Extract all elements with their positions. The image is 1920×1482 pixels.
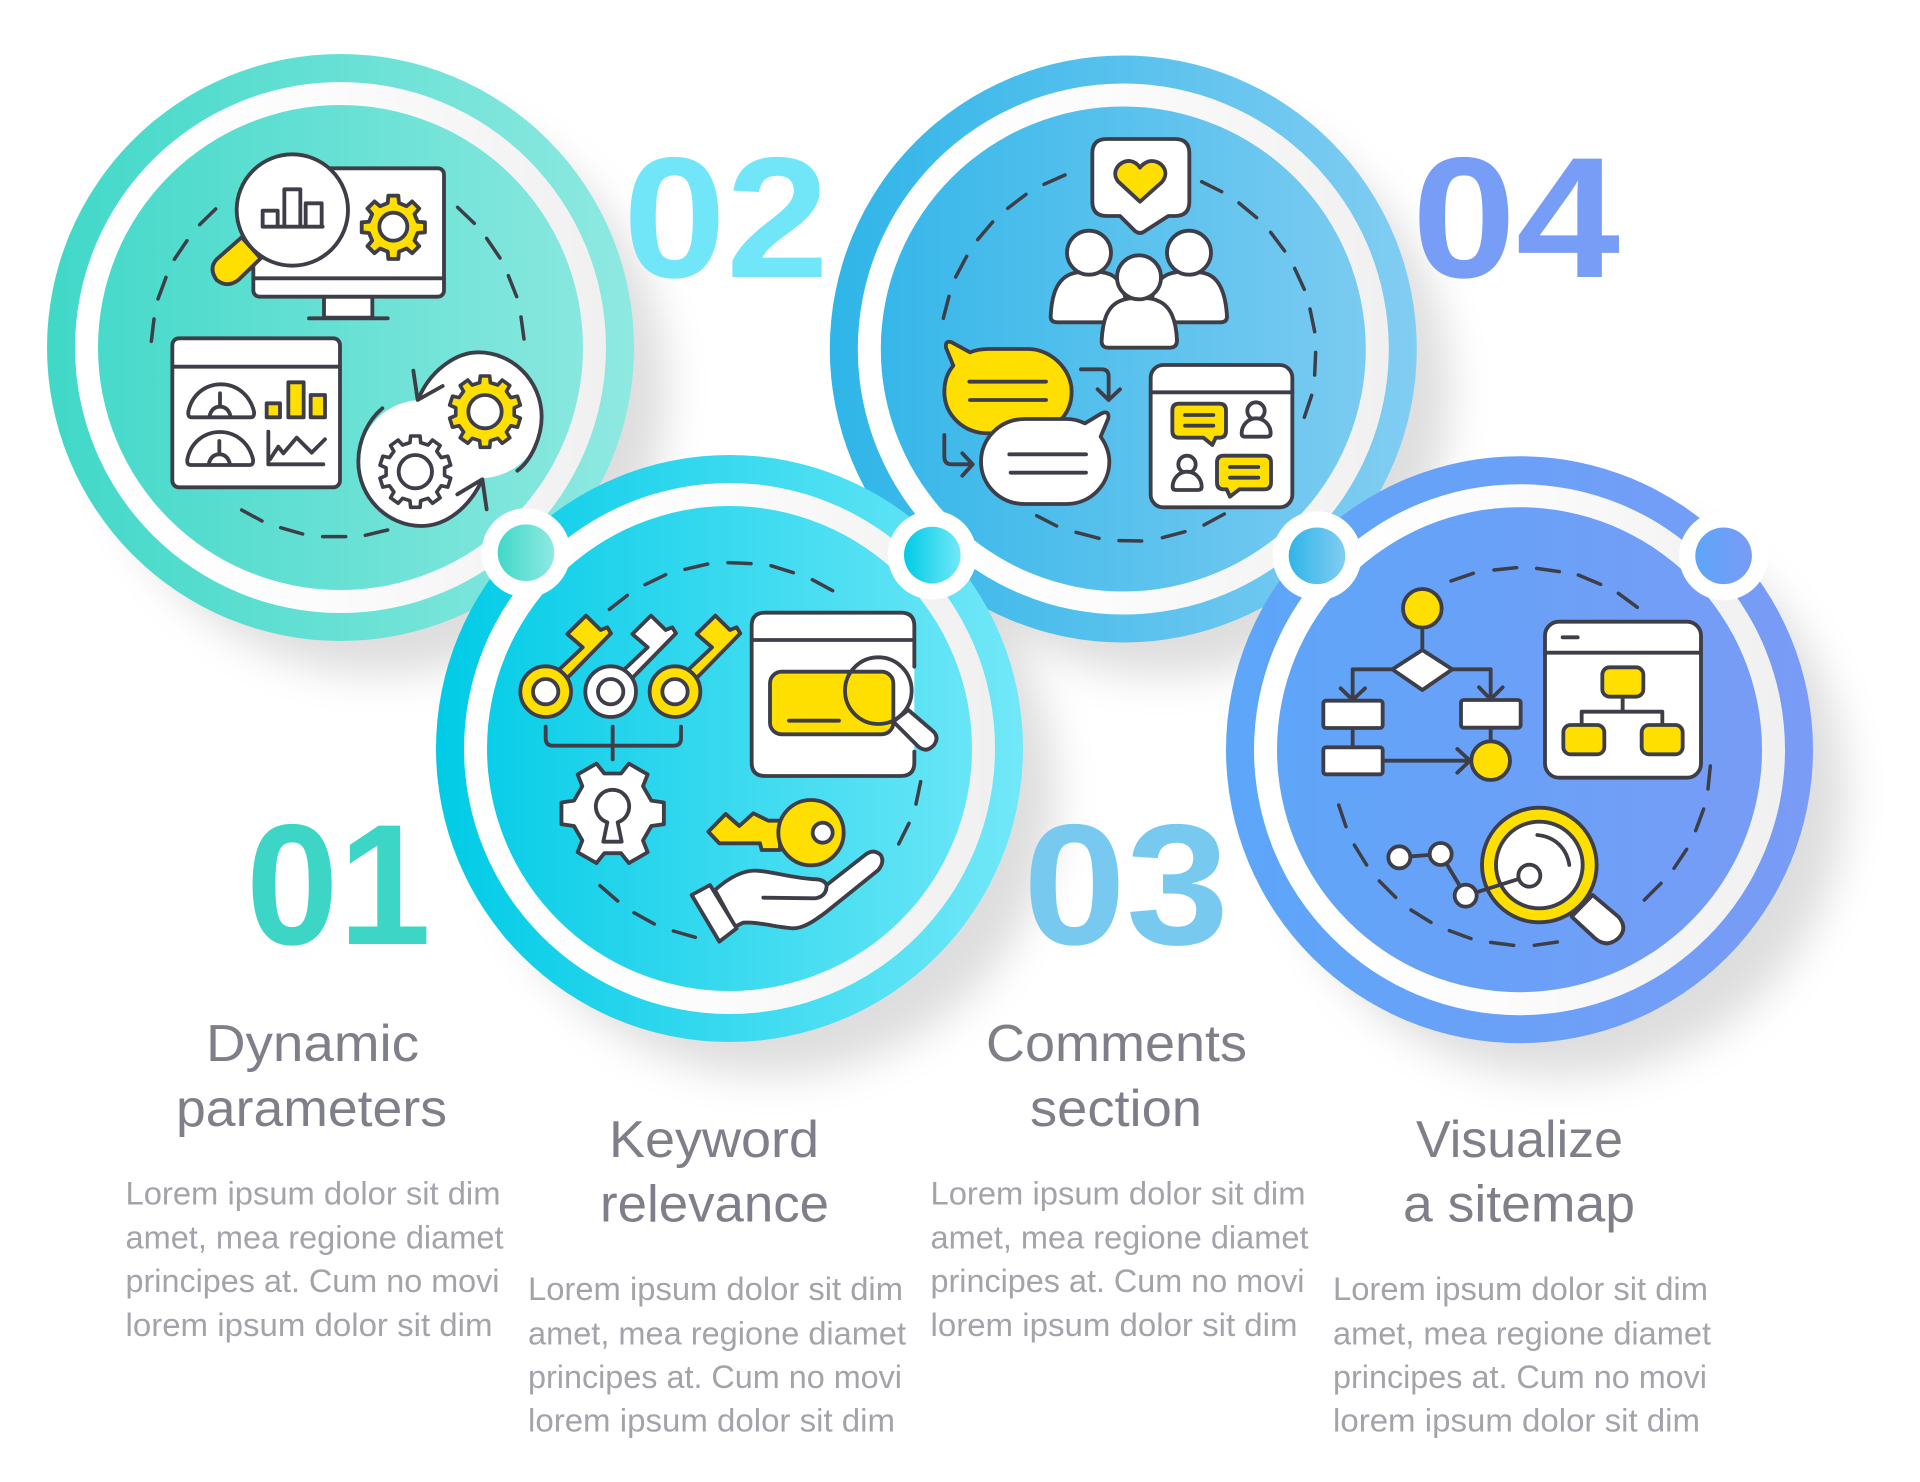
heading: Comments <box>986 1015 1247 1073</box>
heading: Dynamic <box>206 1015 419 1073</box>
body text: principes at. Cum no movi <box>528 1359 902 1395</box>
text block: visualize a sitemap <box>1333 1111 1711 1438</box>
number 03: 03 <box>1023 789 1229 981</box>
body text: principes at. Cum no movi <box>1333 1359 1707 1395</box>
body text: lorem ipsum dolor sit dim <box>930 1307 1298 1343</box>
body text: lorem ipsum dolor sit dim <box>126 1307 492 1343</box>
icons: community, chat, comment window <box>943 139 1316 541</box>
connector dot 2 <box>888 510 977 600</box>
body text: Lorem ipsum dolor sit dim <box>930 1176 1306 1212</box>
body text <box>126 1176 504 1343</box>
connector dot 4 <box>1679 511 1768 600</box>
heading <box>176 1015 447 1138</box>
body text <box>930 1176 1309 1343</box>
body text: Lorem ipsum dolor sit dim <box>1333 1271 1708 1307</box>
icons: keys, keyhole gear, search window, key in hand <box>520 563 937 942</box>
text block: comments section <box>930 1015 1309 1343</box>
number 01: 01 <box>246 789 431 981</box>
body text: lorem ipsum dolor sit dim <box>528 1402 895 1438</box>
panel: circle 1 dynamic parameters <box>47 54 634 641</box>
heading <box>986 1015 1247 1138</box>
heading: relevance <box>600 1176 829 1234</box>
body text: amet, mea regione diamet <box>930 1220 1309 1256</box>
connector dot 3 <box>1272 511 1362 600</box>
soft drop shadows <box>97 105 1846 1077</box>
heading: a sitemap <box>1403 1176 1635 1234</box>
body text: lorem ipsum dolor sit dim <box>1333 1402 1700 1438</box>
icons: analytics, dashboard, gears <box>151 154 543 537</box>
number 04: 04 <box>1412 122 1620 314</box>
heading: Visualize <box>1416 1111 1623 1169</box>
heading: section <box>1030 1080 1202 1138</box>
body text <box>1333 1271 1711 1438</box>
text block: dynamic parameters <box>126 1015 504 1343</box>
connector dot 1 <box>482 508 570 597</box>
panel: circle 2 keyword relevance <box>436 455 1023 1042</box>
number 02: 02 <box>623 122 829 314</box>
body text: Lorem ipsum dolor sit dim <box>528 1271 903 1307</box>
heading <box>1403 1111 1635 1234</box>
panel: circle 4 visualize a sitemap <box>1226 456 1813 1043</box>
icons: flowchart, sitemap window, magnifier with nodes <box>1323 568 1710 945</box>
body text: principes at. Cum no movi <box>930 1263 1304 1299</box>
heading <box>600 1111 829 1234</box>
heading: Keyword <box>609 1111 819 1169</box>
body text <box>528 1271 906 1438</box>
heading: parameters <box>176 1080 447 1138</box>
body text: amet, mea regione diamet <box>126 1220 504 1256</box>
body text: amet, mea regione diamet <box>1333 1316 1711 1352</box>
body text: amet, mea regione diamet <box>528 1316 906 1352</box>
body text: Lorem ipsum dolor sit dim <box>126 1176 500 1212</box>
text block: keyword relevance <box>528 1111 906 1438</box>
body text: principes at. Cum no movi <box>126 1263 499 1299</box>
panel: circle 3 comments section <box>830 56 1417 642</box>
